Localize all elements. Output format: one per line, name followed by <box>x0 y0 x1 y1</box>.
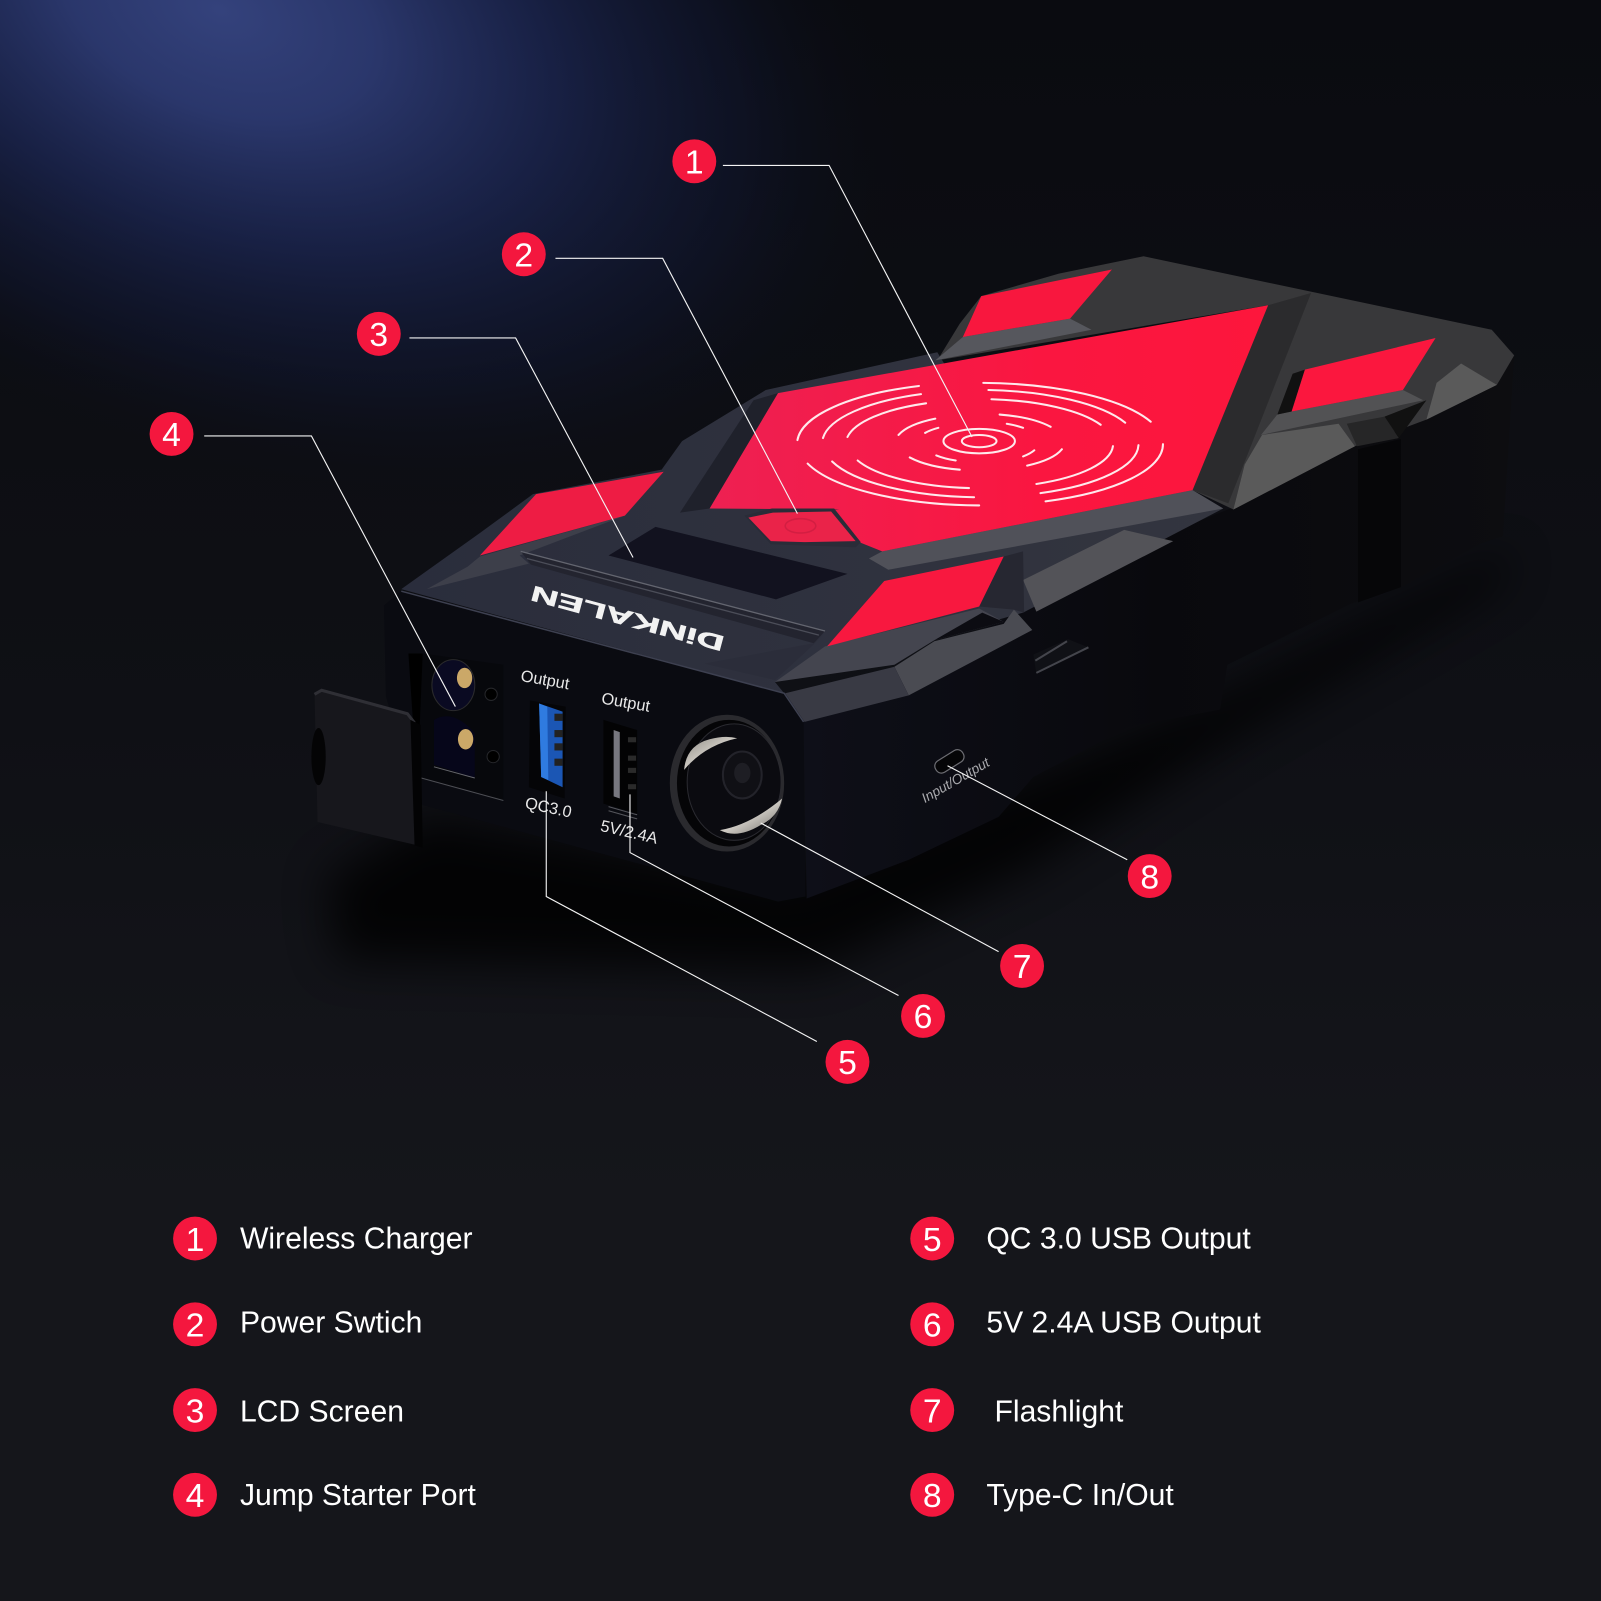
legend item 5: QC 3.0 USB Output <box>986 1223 1251 1256</box>
legend item 4: Jump Starter Port <box>240 1479 477 1512</box>
label: input/output: Input/Output <box>919 754 993 806</box>
legend item 2: Power Swtich <box>240 1306 422 1339</box>
marker 8 <box>1128 854 1172 898</box>
marker 2: 2 <box>514 237 533 274</box>
marker 6: 6 <box>914 999 932 1036</box>
left top wedge <box>427 516 625 589</box>
marker 4: 4 <box>162 417 181 454</box>
label: output: Output <box>519 667 571 693</box>
red accent top <box>963 270 1112 337</box>
front right bevels <box>775 530 1173 722</box>
main red wireless panel <box>710 305 1268 551</box>
frame left of main panel <box>680 393 778 513</box>
legend item 6: 5V 2.4A USB Output <box>986 1306 1261 1339</box>
marker 5: 5 <box>838 1045 857 1082</box>
red accent bottom <box>827 556 1004 646</box>
label: QC3.0: QC3.0 <box>523 794 573 822</box>
label: 5V/2.4A: 5V/2.4A <box>599 817 659 848</box>
marker 5 <box>826 1040 869 1084</box>
legend item 8: Type-C In/Out <box>986 1479 1174 1512</box>
port cover <box>311 690 423 847</box>
product: jump starter <box>311 256 1514 902</box>
legend item 1: Wireless Charger <box>240 1223 473 1256</box>
marker 3: 3 <box>369 317 388 354</box>
jump starter port <box>408 653 503 800</box>
wireless charging icon <box>797 383 1163 505</box>
frame right of main panel <box>1193 293 1311 503</box>
legend item 6: 6 <box>923 1308 942 1345</box>
legend item 7: Flashlight <box>994 1395 1124 1428</box>
label: output 2: Output <box>600 690 652 716</box>
front edge line <box>401 591 804 722</box>
legend item 3 <box>173 1388 404 1432</box>
legend item 3: 3 <box>186 1393 204 1430</box>
leader lines <box>204 165 1127 1041</box>
flashlight <box>670 715 784 852</box>
LCD screen <box>609 527 847 599</box>
marker 3 <box>357 312 401 356</box>
floor shadow <box>327 551 1511 970</box>
right side body <box>804 355 1514 899</box>
Type-C port <box>932 747 966 775</box>
side vent <box>1033 639 1088 674</box>
legend item 7: 7 <box>923 1393 942 1430</box>
marker 6 <box>901 994 945 1038</box>
legend item 1 <box>173 1217 473 1260</box>
back top shell <box>937 256 1514 510</box>
power button <box>744 508 861 547</box>
logo groove <box>521 551 825 643</box>
legend item 3: LCD Screen <box>240 1395 404 1428</box>
red accent right <box>1292 338 1436 411</box>
right gray bevels <box>1233 363 1497 510</box>
legend <box>173 1217 1261 1517</box>
legend item 8 <box>910 1473 1174 1517</box>
legend item 8: 8 <box>923 1478 942 1515</box>
marker 2 <box>502 232 546 276</box>
marker 1: 1 <box>685 145 704 182</box>
front face <box>384 591 806 902</box>
5V 2.4A USB port <box>603 720 637 819</box>
legend item 2: 2 <box>186 1308 204 1345</box>
legend item 6 <box>910 1302 1261 1346</box>
marker 8: 8 <box>1140 859 1159 896</box>
legend item 5: 5 <box>923 1222 942 1259</box>
legend item 1: 1 <box>186 1222 204 1259</box>
side segment shading <box>1358 439 1401 602</box>
marker 7 <box>1000 944 1044 988</box>
callout markers <box>150 139 1172 1084</box>
brand logo: DiNKALEN <box>528 581 727 655</box>
legend item 2 <box>173 1302 422 1346</box>
bevel under back red <box>935 319 1091 360</box>
wedge right of groove <box>705 632 825 680</box>
red accent front <box>480 472 664 555</box>
front top shell <box>401 352 1223 693</box>
legend item 4 <box>173 1473 477 1517</box>
legend item 4: 4 <box>186 1478 204 1515</box>
legend item 5 <box>910 1217 1251 1260</box>
legend item 7 <box>910 1388 1124 1432</box>
marker 4 <box>150 412 193 456</box>
QC 3.0 USB port <box>529 700 566 798</box>
marker 1 <box>672 139 716 183</box>
bevel under main panel <box>869 490 1223 570</box>
marker 7: 7 <box>1013 949 1031 986</box>
